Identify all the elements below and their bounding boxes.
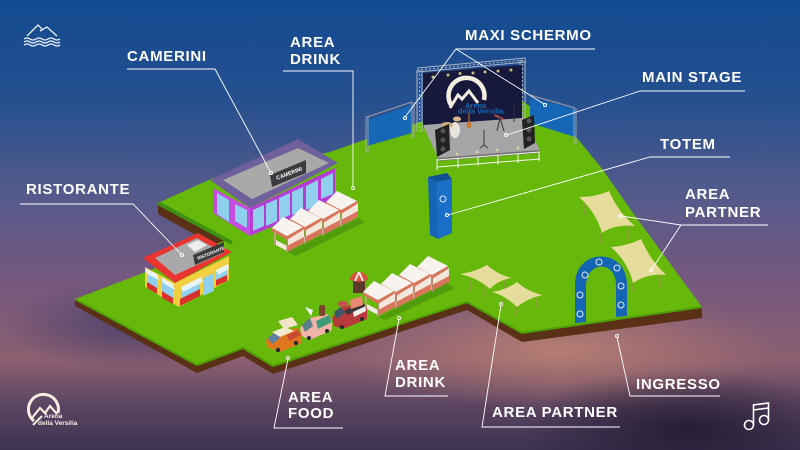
label: area drink top: AREA (290, 34, 335, 51)
right speaker (522, 115, 535, 149)
restaurant windows (148, 266, 227, 305)
icon: music note (744, 403, 768, 430)
label: area food: FOOD (288, 405, 334, 422)
label: ingresso: INGRESSO (636, 376, 721, 393)
orange truck (266, 317, 302, 352)
air conditioner (187, 240, 207, 252)
label: area partner bottom (482, 302, 620, 427)
label: main stage (504, 69, 745, 136)
camerini sign: CAMERINI (276, 166, 304, 182)
label: area partner bottom: AREA PARTNER (492, 404, 618, 421)
notch soil (158, 203, 232, 252)
stalls behind camerini (272, 191, 365, 256)
logo: arena della versilia: Arena (44, 413, 63, 420)
umbrella (350, 272, 368, 293)
red bases (147, 275, 227, 306)
footlights (456, 146, 520, 156)
food trucks (266, 272, 368, 352)
label: area partner right: AREA (685, 186, 730, 203)
drums (441, 116, 461, 138)
truss posts (366, 102, 576, 153)
label: ristorante (20, 181, 184, 256)
awnings (145, 264, 229, 292)
building: camerini (210, 139, 338, 236)
label: totem: TOTEM (660, 136, 716, 153)
label: maxi schermo (404, 27, 595, 120)
grass (75, 100, 702, 366)
ristorante sign: RISTORANTE (197, 245, 225, 261)
entrance arch (575, 256, 627, 323)
building: ristorante (143, 233, 232, 307)
label: area partner right (618, 186, 768, 272)
logo: arena della versilia (28, 394, 78, 427)
tents front (460, 265, 543, 315)
label: area drink bottom: AREA (395, 357, 440, 374)
red truck (332, 296, 367, 329)
left speaker (435, 124, 450, 157)
maxi screen (423, 65, 522, 127)
mic stand (480, 130, 488, 148)
label: area drink bottom: DRINK (395, 374, 446, 391)
pink truck (300, 305, 332, 340)
main stage (366, 58, 576, 170)
label: area food: AREA (288, 389, 333, 406)
speaker cones (440, 118, 532, 152)
label: main stage: MAIN STAGE (642, 69, 742, 86)
label: maxi schermo: MAXI SCHERMO (465, 27, 592, 44)
stage lights (432, 68, 512, 78)
totem (428, 173, 452, 239)
top truss (417, 58, 526, 72)
stalls near food trucks (363, 256, 455, 320)
screen logo (448, 78, 504, 116)
label: area drink bottom (385, 316, 448, 396)
guitar and keyboard (466, 105, 514, 131)
island ground (75, 100, 702, 374)
stage fence (437, 152, 540, 170)
grass front rim (75, 299, 702, 366)
hedge (158, 203, 232, 243)
right side banner (530, 98, 575, 137)
left side banner (367, 105, 412, 146)
windows (217, 173, 333, 231)
soil edge (75, 299, 702, 374)
label: ingresso (616, 334, 721, 396)
label: camerini: CAMERINI (127, 48, 207, 65)
label: area drink top: DRINK (290, 51, 341, 68)
icon: mountains and waves (24, 25, 60, 46)
truss towers (417, 60, 525, 132)
logo: arena della versilia: della Versilia (38, 420, 78, 427)
banner ropes (367, 95, 575, 117)
label: ristorante: RISTORANTE (26, 181, 130, 198)
screen logo: della Versilia (458, 106, 504, 116)
label: area drink top (283, 34, 354, 190)
screen logo: Arena (465, 101, 487, 110)
stage floor (423, 118, 540, 158)
label: area partner right: PARTNER (685, 204, 761, 221)
tents right (579, 191, 666, 292)
label: area food (274, 356, 343, 428)
label: camerini (127, 48, 272, 174)
label: totem (446, 136, 730, 216)
